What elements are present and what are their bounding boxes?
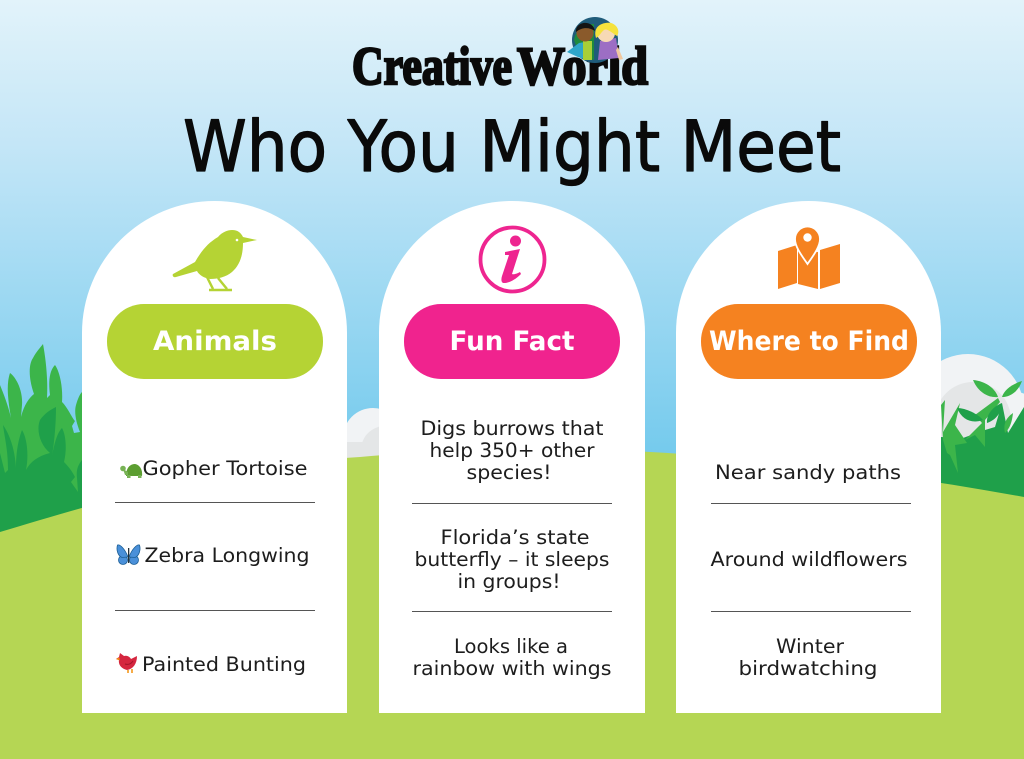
icon: info	[480, 228, 544, 292]
icon: map with pin	[778, 226, 840, 289]
location: winter birdwatching	[738, 635, 878, 680]
fact: gopher tortoise: species!	[466, 461, 552, 484]
fact: painted bunting	[412, 635, 612, 680]
location: winter birdwatching: birdwatching	[738, 657, 878, 680]
fact: gopher tortoise: help 350+ other	[430, 439, 596, 462]
logo wordmark	[352, 36, 648, 96]
logo	[352, 17, 648, 96]
heading pill: animals	[107, 304, 323, 379]
title: Who You Might Meet	[183, 106, 841, 188]
heading pill: where to find	[701, 304, 917, 379]
sky background	[0, 0, 1024, 480]
logo globe with children	[567, 17, 623, 63]
fact: zebra longwing	[414, 526, 610, 593]
right bushes	[941, 380, 1024, 500]
heading pill: fun fact: Fun Fact	[450, 326, 575, 357]
fact: painted bunting: rainbow with wings	[412, 657, 612, 680]
left bushes	[0, 344, 82, 540]
panel: fun fact	[379, 201, 645, 713]
panel: where to find	[676, 201, 941, 713]
location: wildflowers: Around wildflowers	[710, 548, 908, 571]
location: sandy paths: Near sandy paths	[715, 461, 901, 484]
heading pill: fun fact	[404, 304, 620, 379]
heading pill: animals: Animals	[153, 326, 277, 357]
icon: bird	[173, 230, 257, 290]
panel: animals	[82, 201, 347, 713]
green hills	[0, 448, 1024, 759]
item: gopher tortoise: Gopher Tortoise	[142, 457, 308, 480]
item: zebra longwing: Zebra Longwing	[144, 544, 310, 567]
fact: gopher tortoise	[420, 417, 604, 484]
fact: zebra longwing: in groups!	[458, 570, 560, 593]
logo wordmark: World	[517, 36, 648, 96]
fact: zebra longwing: Florida’s state	[440, 526, 590, 549]
logo wordmark: Creative	[352, 36, 512, 96]
middle cloud	[343, 408, 409, 474]
fact: zebra longwing: butterfly – it sleeps	[414, 548, 610, 571]
fact: painted bunting: Looks like a	[454, 635, 568, 658]
location: winter birdwatching: Winter	[776, 635, 845, 658]
heading pill: where to find: Where to Find	[709, 326, 909, 357]
item: painted bunting: Painted Bunting	[142, 653, 306, 676]
fact: gopher tortoise: Digs burrows that	[420, 417, 604, 440]
right cloud	[912, 354, 1024, 466]
